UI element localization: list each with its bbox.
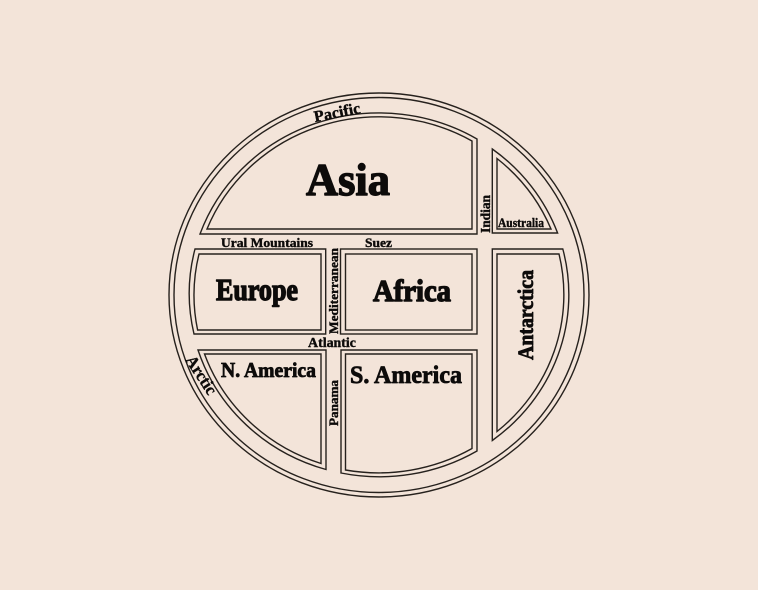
label: Suez: Suez — [365, 235, 392, 250]
label: Africa: Africa — [373, 273, 451, 308]
label: Ural Mountains: Ural Mountains — [221, 235, 313, 250]
label: Europe: Europe — [216, 272, 298, 307]
label: Australia: Australia — [498, 216, 545, 230]
outer globe double ring — [169, 93, 589, 497]
panel: Europe — [189, 249, 326, 334]
label: S. America: S. America — [350, 362, 462, 389]
panel: South America — [341, 350, 477, 477]
label: Indian: Indian — [479, 195, 494, 233]
label: Pacific: Pacific — [313, 100, 362, 126]
panel: North America — [198, 350, 326, 470]
label: Antarctica: Antarctica — [513, 270, 538, 360]
label: Mediterranean: Mediterranean — [326, 247, 341, 334]
label: Asia: Asia — [306, 154, 390, 205]
panel: Antarctica — [492, 249, 569, 440]
label: Atlantic: Atlantic — [308, 336, 356, 351]
panel: Australia — [492, 149, 558, 233]
label: N. America: N. America — [221, 358, 316, 382]
label: Arctic: Arctic — [182, 352, 221, 399]
panel: Asia — [200, 113, 477, 234]
panel: Africa — [340, 249, 477, 334]
label: Panama: Panama — [326, 379, 341, 426]
